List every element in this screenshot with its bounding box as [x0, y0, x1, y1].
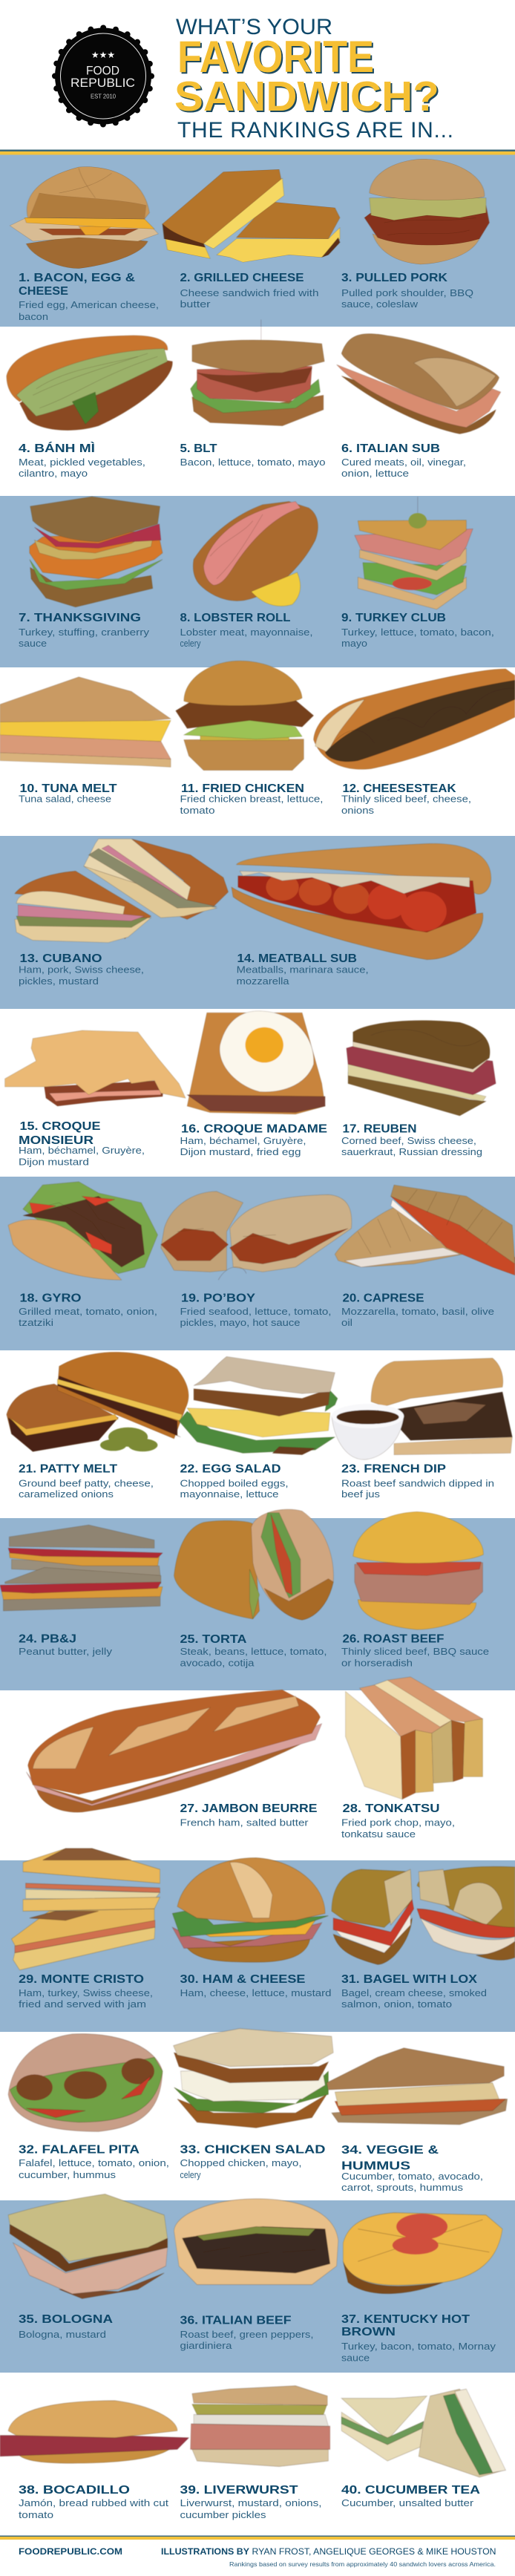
- illustration: fried chicken bun: [176, 661, 314, 771]
- sandwich 34: veggie and hummus: [327, 2048, 508, 2193]
- name: 26. ROAST BEEF: [343, 1633, 445, 1645]
- name: [341, 2144, 439, 2172]
- ingredients: Cured meats, oil, vinegar,: [341, 457, 466, 468]
- sandwich 18: gyro: [8, 1182, 157, 1328]
- sandwich 40: cucumber tea: [341, 2389, 505, 2508]
- name: 16. CROQUE MADAME: [181, 1122, 327, 1136]
- ingredients: [180, 1135, 306, 1157]
- illustration: falafel pita: [8, 2034, 163, 2131]
- name: HUMMUS: [341, 2160, 410, 2172]
- ingredients: [19, 627, 150, 649]
- sandwich 16: croque madame: [180, 1011, 327, 1157]
- panel: row 7 background: [0, 1177, 515, 1350]
- ingredients: [19, 457, 145, 479]
- ingredients: Dijon mustard: [19, 1157, 89, 1167]
- ingredients: tomato: [180, 805, 215, 816]
- ingredients: Peanut butter, jelly: [19, 1646, 113, 1657]
- sandwich 39: liverwurst: [180, 2386, 330, 2520]
- name: 3. PULLED PORK: [341, 272, 447, 284]
- illustration: veggie and hummus: [327, 2048, 508, 2125]
- name: 32. FALAFEL PITA: [19, 2144, 140, 2156]
- sandwich 12: cheesesteak: [314, 669, 515, 816]
- illustration: bagel halves with lox: [332, 1866, 515, 1964]
- ingredients: sauce: [19, 638, 47, 649]
- ingredients: Roast beef sandwich dipped in: [341, 1477, 494, 1489]
- ingredients: bacon: [19, 311, 48, 322]
- sandwich 36: italian beef: [174, 2199, 338, 2351]
- name: 30. HAM & CHEESE: [180, 1973, 306, 1986]
- sandwich 10: tuna melt: [0, 677, 171, 805]
- ingredients: Falafel, lettuce, tomato, onion,: [19, 2157, 169, 2168]
- ingredients: mozzarella: [237, 975, 289, 987]
- ingredients: Turkey, bacon, tomato, Mornay: [341, 2341, 496, 2352]
- illustration: croque madame with egg: [187, 1011, 325, 1114]
- sandwich 3: pulled pork: [341, 159, 489, 310]
- sandwich 28: tonkatsu: [341, 1677, 482, 1840]
- name: 14. MEATBALL SUB: [237, 952, 357, 965]
- ingredients: Liverwurst, mustard, onions,: [180, 2497, 322, 2508]
- ingredients: tomato: [19, 2509, 53, 2520]
- ingredients: Lobster meat, mayonnaise,: [180, 627, 313, 638]
- name: 10. TUNA MELT: [19, 782, 117, 795]
- ingredients: cucumber, hummus: [19, 2169, 117, 2180]
- ingredients: pickles, mustard: [19, 975, 99, 987]
- ingredients: [19, 964, 144, 987]
- ingredients: mayonnaise, lettuce: [180, 1488, 279, 1500]
- ingredients: [180, 1306, 331, 1328]
- sandwich 11: fried chicken: [176, 661, 324, 816]
- ingredients: fried and served with jam: [19, 1998, 146, 2010]
- ingredients: sauce: [341, 2352, 370, 2364]
- title: WHAT’S YOUR: [176, 15, 332, 39]
- illustration: patty melt with pickles: [7, 1352, 188, 1451]
- name: 40. CUCUMBER TEA: [341, 2484, 481, 2497]
- name: 2. GRILLED CHEESE: [180, 272, 304, 284]
- sandwich 32: falafel pita: [8, 2034, 169, 2180]
- ingredients: [341, 457, 466, 479]
- panel: row 9 background: [0, 1518, 515, 1690]
- ingredients: [341, 1646, 489, 1669]
- illustration: tuna melt: [0, 677, 171, 767]
- name: 15. CROQUE: [19, 1120, 101, 1133]
- ingredients: [180, 2497, 322, 2520]
- ingredients: Corned beef, Swiss cheese,: [341, 1135, 476, 1146]
- illustration: jambon beurre baguette: [26, 1690, 322, 1812]
- ingredients: [341, 793, 471, 816]
- illustration: PB&J stacked halves: [0, 1525, 163, 1611]
- name: 35. BOLOGNA: [19, 2313, 114, 2326]
- ingredients: [19, 299, 159, 322]
- name: [19, 272, 136, 298]
- illustration: pulled pork bun: [364, 159, 489, 264]
- ingredients: Roast beef, green peppers,: [180, 2329, 313, 2340]
- logo: Food Republic badge: EST 2010: [91, 94, 117, 99]
- ingredients: Ham, cheese, lettuce, mustard: [180, 1987, 331, 1998]
- illustration: croque monsieur: [5, 1030, 186, 1106]
- panel: row 13 background: [0, 2200, 515, 2373]
- ingredients: Meat, pickled vegetables,: [19, 457, 145, 468]
- name: 25. TORTA: [180, 1633, 247, 1646]
- footer: credits: ILLUSTRATIONS BY: [161, 2546, 249, 2557]
- ingredients: Ham, béchamel, Gruyère,: [19, 1145, 145, 1156]
- sandwich 24: PB&J: [0, 1525, 163, 1657]
- name: 38. BOCADILLO: [19, 2484, 130, 2497]
- name: 18. GYRO: [19, 1292, 82, 1305]
- sandwich 2: grilled cheese: [163, 169, 340, 310]
- ingredients: Dijon mustard, fried egg: [180, 1146, 301, 1157]
- name: 33. CHICKEN SALAD: [180, 2144, 325, 2156]
- footer divider: [0, 2536, 515, 2540]
- name: 20. CAPRESE: [343, 1292, 424, 1305]
- name: 22. EGG SALAD: [180, 1462, 281, 1476]
- sandwich 19: po'boy: [161, 1191, 352, 1328]
- name: 7. THANKSGIVING: [19, 612, 141, 624]
- sandwich 21: patty melt: [7, 1352, 188, 1500]
- sandwich 38: bocadillo: [0, 2401, 188, 2520]
- sandwich 26: roast beef: [341, 1511, 489, 1669]
- illustration: bacon egg cheese roll: [10, 167, 158, 269]
- ingredients: carrot, sprouts, hummus: [341, 2182, 464, 2193]
- ingredients: [180, 1646, 327, 1669]
- ingredients: [180, 627, 313, 649]
- ingredients: butter: [180, 298, 211, 310]
- sandwich 5: BLT: [180, 319, 325, 468]
- sandwich 6: Italian sub: [337, 333, 501, 479]
- name: 31. BAGEL WITH LOX: [341, 1973, 477, 1986]
- sandwich 31: bagel with lox: [332, 1866, 515, 2010]
- illustration: lobster roll with lemon: [193, 502, 318, 606]
- ingredients: [341, 1987, 487, 2010]
- name: 12. CHEESESTEAK: [343, 782, 456, 795]
- ingredients: [19, 2157, 169, 2180]
- ingredients: [19, 1306, 157, 1328]
- panel: row 1 background: [0, 154, 515, 327]
- ingredients: [341, 627, 494, 649]
- ingredients: Fried chicken breast, lettuce,: [180, 793, 324, 805]
- footer: site url: FOODREPUBLIC.COM: [19, 2546, 122, 2557]
- ingredients: Bagel, cream cheese, smoked: [341, 1987, 487, 1998]
- ingredients: [341, 2171, 483, 2193]
- ingredients: beef jus: [341, 1488, 381, 1500]
- name: 8. LOBSTER ROLL: [180, 612, 291, 624]
- sandwich 30: ham and cheese: [172, 1857, 331, 1998]
- ingredients: [341, 287, 473, 310]
- name: 13. CUBANO: [19, 952, 102, 965]
- logo: Food Republic badge: ★★★: [91, 50, 115, 60]
- illustration: po'boy halves: [161, 1191, 352, 1280]
- sandwich 17: reuben: [341, 1021, 496, 1157]
- ingredients: Ham, béchamel, Gruyère,: [180, 1135, 306, 1146]
- panel: row 5 background: [0, 836, 515, 1009]
- ingredients: Ground beef patty, cheese,: [19, 1477, 154, 1489]
- ingredients: [180, 793, 324, 816]
- name: CHEESE: [19, 285, 68, 298]
- title: THE RANKINGS ARE IN...: [177, 118, 453, 143]
- name: [19, 1120, 101, 1147]
- ingredients: [180, 287, 319, 310]
- ingredients: Fried pork chop, mayo,: [341, 1817, 455, 1828]
- illustration: monte cristo: [11, 1848, 160, 1970]
- ingredients: cucumber pickles: [180, 2509, 266, 2520]
- ingredients: celery: [180, 638, 201, 649]
- illustration: banh mi: [7, 336, 172, 431]
- ingredients: [19, 1987, 153, 2010]
- sandwich 27: jambon beurre: [26, 1690, 322, 1828]
- illustration: cheesesteak: [314, 669, 515, 769]
- ingredients: sauce, coleslaw: [341, 298, 419, 310]
- ingredients: [19, 1145, 145, 1167]
- ingredients: Steak, beans, lettuce, tomato,: [180, 1646, 327, 1657]
- sandwich 37: kentucky hot brown: [341, 2213, 502, 2364]
- name: 34. VEGGIE &: [341, 2144, 439, 2157]
- name: BROWN: [341, 2326, 396, 2338]
- ingredients: Bacon, lettuce, tomato, mayo: [180, 457, 325, 468]
- ingredients: Tuna salad, cheese: [19, 793, 111, 805]
- ingredients: tonkatsu sauce: [341, 1828, 416, 1840]
- sandwich 29: monte cristo: [11, 1848, 160, 2010]
- name: 9. TURKEY CLUB: [341, 612, 446, 624]
- name: 21. PATTY MELT: [19, 1462, 117, 1476]
- name: 19. PO’BOY: [181, 1292, 255, 1305]
- panel: header divider line: [0, 150, 515, 154]
- sandwich 14: meatball sub: [232, 843, 491, 987]
- ingredients: Bologna, mustard: [19, 2329, 106, 2340]
- ingredients: Mozzarella, tomato, basil, olive: [341, 1306, 494, 1317]
- sandwich 35: bologna: [8, 2194, 168, 2340]
- illustration: cubano halves: [15, 839, 229, 943]
- sandwich 25: torta: [174, 1509, 333, 1669]
- ingredients: [341, 1135, 482, 1157]
- title: FAVORITE: [177, 32, 374, 82]
- sandwich 33: chicken salad: [174, 2028, 333, 2180]
- ingredients: Ham, pork, Swiss cheese,: [19, 964, 144, 975]
- ingredients: [19, 1477, 154, 1500]
- panel: row 3 background: [0, 496, 515, 667]
- sandwich 1: bacon, egg and cheese: [10, 167, 159, 322]
- illustration: bocadillo: [0, 2401, 188, 2463]
- ingredients: oil: [341, 1317, 352, 1328]
- sandwich 8: lobster roll: [180, 502, 318, 649]
- ingredients: pickles, mayo, hot sauce: [180, 1317, 300, 1328]
- sandwich 15: croque monsieur: [5, 1030, 186, 1167]
- illustration: cucumber tea triangles: [341, 2389, 505, 2477]
- ingredients: mayo: [341, 638, 367, 649]
- illustration: meatball sub: [232, 843, 491, 960]
- illustration: kentucky hot brown: [343, 2213, 502, 2294]
- illustration: caprese panini: [335, 1185, 515, 1275]
- ingredients: giardiniera: [180, 2340, 232, 2351]
- ingredients: Ham, turkey, Swiss cheese,: [19, 1987, 153, 1998]
- name: 4. BÁNH MÌ: [19, 441, 95, 455]
- ingredients: [341, 1306, 494, 1328]
- ingredients: Pulled pork shoulder, BBQ: [341, 287, 473, 298]
- sandwich 9: turkey club: [341, 497, 494, 649]
- title: SANDWICH?: [174, 73, 439, 120]
- ingredients: [19, 2497, 168, 2520]
- illustration: bologna: [8, 2194, 168, 2298]
- ingredients: caramelized onions: [19, 1488, 114, 1500]
- ingredients: Thinly sliced beef, cheese,: [341, 793, 471, 805]
- footer: credits: RYAN FROST, ANGELIQUE GEORGES & MIKE HOUSTON: [252, 2546, 496, 2557]
- name: 5. BLT: [180, 442, 217, 455]
- illustration: liverwurst: [191, 2386, 330, 2466]
- illustration: tonkatsu sando slices: [346, 1677, 482, 1799]
- name: 29. MONTE CRISTO: [19, 1973, 144, 1986]
- name: 17. REUBEN: [343, 1122, 417, 1136]
- ingredients: celery: [180, 2169, 201, 2180]
- illustration: french dip and bowl of jus: [332, 1359, 512, 1459]
- name: 28. TONKATSU: [343, 1802, 439, 1815]
- ingredients: [341, 2341, 496, 2364]
- ingredients: [180, 2329, 313, 2351]
- ingredients: cilantro, mayo: [19, 468, 88, 479]
- ingredients: or horseradish: [341, 1657, 413, 1669]
- name: 27. JAMBON BEURRE: [180, 1802, 318, 1815]
- ingredients: salmon, onion, tomato: [341, 1998, 452, 2010]
- illustration: ham and cheese bun: [172, 1857, 328, 1962]
- name: 23. FRENCH DIP: [341, 1462, 446, 1476]
- ingredients: Fried egg, American cheese,: [19, 299, 159, 310]
- name: 36. ITALIAN BEEF: [180, 2315, 292, 2327]
- ingredients: tzatziki: [19, 1317, 53, 1328]
- ingredients: Chopped chicken, mayo,: [180, 2157, 301, 2168]
- sandwich 13: cubano: [15, 839, 229, 987]
- ingredients: [180, 2157, 301, 2180]
- illustration: turkey club with olive pick: [355, 497, 473, 609]
- name: 6. ITALIAN SUB: [341, 442, 440, 455]
- illustration: roast beef bun: [353, 1511, 483, 1629]
- sandwich 20: caprese: [335, 1185, 515, 1328]
- ingredients: [180, 1477, 288, 1500]
- title: [174, 15, 453, 143]
- illustration: egg salad: [179, 1356, 338, 1455]
- ingredients: Turkey, stuffing, cranberry: [19, 627, 150, 638]
- illustration: torta halves: [174, 1509, 333, 1620]
- sandwich 4: banh mi: [7, 336, 172, 479]
- name: 11. FRIED CHICKEN: [181, 782, 304, 795]
- panel: row 11 background: [0, 1860, 515, 2032]
- sandwich 7: Thanksgiving: [19, 497, 163, 649]
- illustration: Italian sub: [337, 333, 501, 434]
- name: MONSIEUR: [19, 1134, 94, 1147]
- name: 39. LIVERWURST: [180, 2484, 298, 2497]
- illustration: reuben on marble rye: [347, 1021, 496, 1116]
- ingredients: onions: [341, 805, 375, 816]
- ingredients: Cheese sandwich fried with: [180, 287, 319, 298]
- logo: Food Republic badge: FOOD: [86, 64, 119, 77]
- ingredients: onion, lettuce: [341, 468, 409, 479]
- footer: source note: Rankings based on survey results from approximately 40 sandwich lovers across America.: [229, 2560, 496, 2568]
- ingredients: [341, 1817, 455, 1840]
- ingredients: Meatballs, marinara sauce,: [237, 964, 369, 975]
- ingredients: [341, 1477, 494, 1500]
- ingredients: French ham, salted butter: [180, 1817, 309, 1828]
- illustration: Thanksgiving sandwich: [30, 497, 163, 607]
- ingredients: Cucumber, unsalted butter: [341, 2497, 474, 2508]
- illustration: gyro: [8, 1182, 157, 1280]
- ingredients: avocado, cotija: [180, 1657, 255, 1669]
- ingredients: Cucumber, tomato, avocado,: [341, 2171, 483, 2182]
- ingredients: Turkey, lettuce, tomato, bacon,: [341, 627, 494, 638]
- illustration: chicken salad: [174, 2028, 333, 2128]
- illustration: BLT with pick: [191, 319, 324, 426]
- name: 37. KENTUCKY HOT: [341, 2313, 470, 2326]
- ingredients: sauerkraut, Russian dressing: [341, 1146, 482, 1157]
- ingredients: Jamón, bread rubbed with cut: [19, 2497, 168, 2508]
- name: 24. PB&J: [19, 1633, 76, 1645]
- illustration: italian beef: [174, 2199, 338, 2285]
- ingredients: Fried seafood, lettuce, tomato,: [180, 1306, 331, 1317]
- sandwich 23: french dip: [332, 1359, 512, 1500]
- logo: Food Republic badge: [55, 28, 151, 125]
- logo: Food Republic badge: REPUBLIC: [70, 76, 135, 90]
- ingredients: Grilled meat, tomato, onion,: [19, 1306, 157, 1317]
- name: 1. BACON, EGG &: [19, 272, 136, 284]
- name: [341, 2313, 470, 2338]
- ingredients: Chopped boiled eggs,: [180, 1477, 288, 1489]
- ingredients: [237, 964, 369, 987]
- illustration: grilled cheese: [163, 169, 340, 262]
- ingredients: Thinly sliced beef, BBQ sauce: [341, 1646, 489, 1657]
- sandwich 22: egg salad: [179, 1356, 338, 1500]
